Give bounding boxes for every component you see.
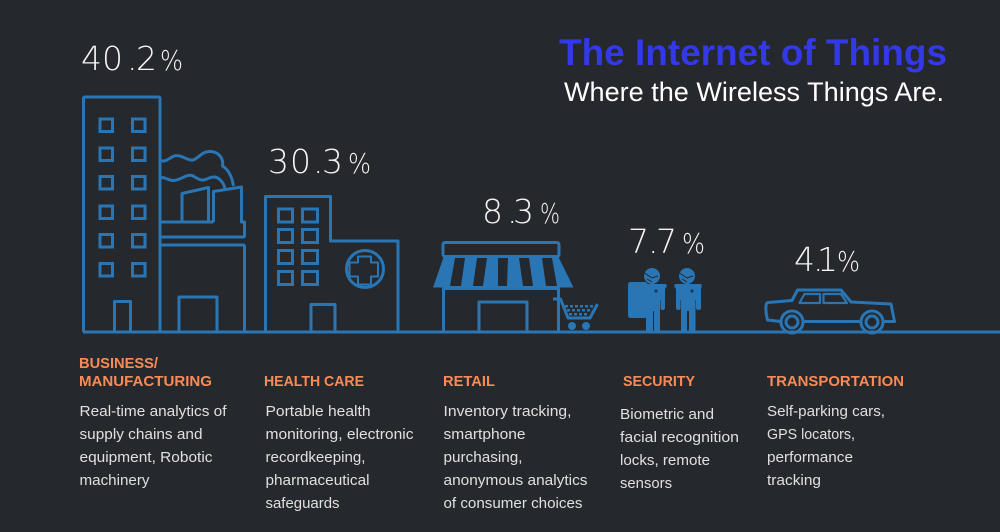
icon: office tower and factory	[84, 97, 244, 332]
stat: transportation 4.1%	[794, 240, 860, 279]
stat: retail 8.3%	[482, 192, 560, 231]
column: health care: HEALTH CARE	[264, 373, 364, 390]
column: health care	[264, 373, 414, 512]
column: security: sensors	[620, 475, 672, 492]
column: security	[620, 373, 739, 492]
column: health care: Portable health	[266, 403, 370, 420]
stat: retail 8.3%: 8.3	[482, 192, 534, 231]
column: security: Biometric and	[620, 406, 714, 423]
column: retail: anonymous analytics	[444, 472, 588, 489]
stat: business 40.2%: %	[160, 44, 183, 77]
column: transportation: performance	[767, 449, 853, 466]
stat: security 7.7%: %	[682, 227, 705, 260]
column: security: SECURITY	[623, 373, 695, 390]
title: Where the Wireless Things Are.	[564, 77, 944, 107]
stat: business 40.2%: 40.2	[81, 39, 157, 78]
column: health care: monitoring, electronic	[266, 426, 414, 443]
title: The Internet of Things	[559, 32, 947, 73]
stat: transportation 4.1%: %	[837, 245, 860, 278]
column: transportation: GPS locators,	[767, 426, 855, 443]
icon: storefront with awning	[433, 242, 574, 332]
column: retail: RETAIL	[443, 373, 495, 390]
column: business / manufacturing: supply chains and	[80, 426, 202, 443]
column: security: locks, remote	[620, 452, 710, 469]
icon: hospital	[266, 196, 398, 332]
column: health care: pharmaceutical	[266, 472, 370, 489]
column: business / manufacturing: MANUFACTURING	[79, 373, 212, 390]
column: business / manufacturing: machinery	[80, 472, 150, 489]
column: retail: of consumer choices	[444, 495, 582, 512]
column: health care: safeguards	[266, 495, 340, 512]
column: transportation	[767, 373, 904, 489]
icon: car	[766, 290, 894, 333]
stat: health care 30.3%: %	[348, 147, 371, 180]
icon: shopping cart	[553, 299, 598, 330]
stat: health care 30.3%: 30.3	[268, 142, 343, 181]
column: transportation: TRANSPORTATION	[767, 373, 904, 390]
column: business / manufacturing	[79, 355, 227, 489]
ground line	[83, 330, 1000, 334]
column: retail	[443, 373, 588, 512]
column: transportation: tracking	[767, 472, 821, 489]
column: retail: smartphone	[444, 426, 526, 443]
column: health care: recordkeeping,	[266, 449, 366, 466]
column: business / manufacturing: Real-time analytics of	[80, 403, 227, 420]
stat: security 7.7%: 7.7	[628, 222, 677, 261]
stat: security 7.7%	[628, 222, 705, 261]
column: business / manufacturing: BUSINESS/	[79, 355, 159, 372]
stat: transportation 4.1%: 4.1	[794, 240, 838, 279]
icon: security guards with shield	[628, 268, 702, 331]
stat: retail 8.3%: %	[540, 197, 560, 230]
column: retail: Inventory tracking,	[444, 403, 572, 420]
title	[559, 32, 947, 107]
column: security: facial recognition	[620, 429, 739, 446]
column: retail: purchasing,	[444, 449, 522, 466]
column: business / manufacturing: equipment, Robotic	[80, 449, 213, 466]
column: transportation: Self-parking cars,	[767, 403, 885, 420]
